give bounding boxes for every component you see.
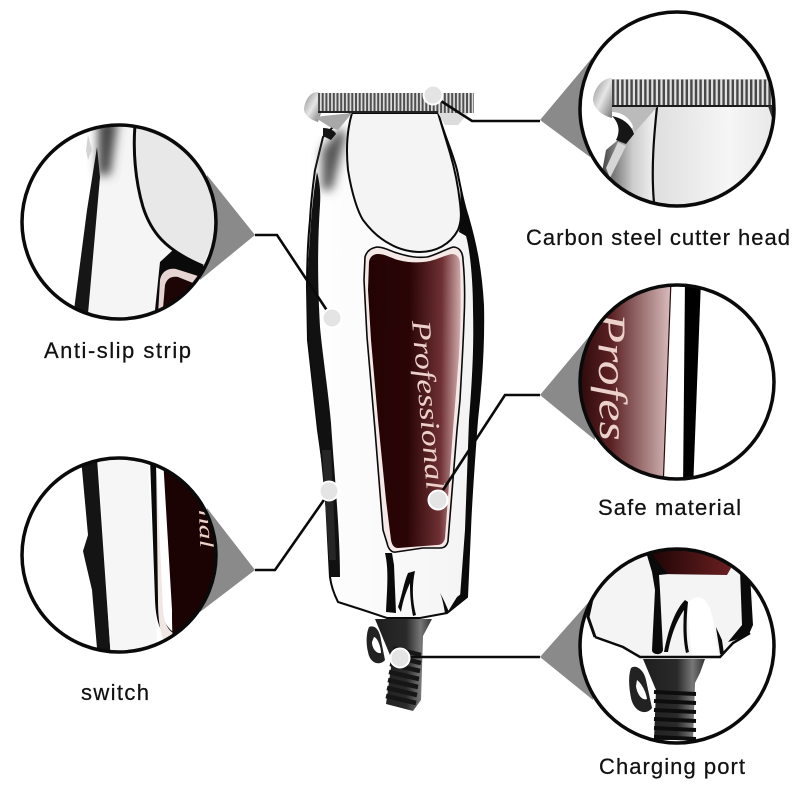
- leader line: [405, 656, 540, 658]
- magnified switch detail: [82, 460, 214, 650]
- marker dots: [320, 86, 448, 668]
- pointer wedge: [540, 333, 595, 440]
- leader line: cutter head: [441, 101, 540, 121]
- script logo: Professional: Professional: [406, 318, 451, 491]
- callout: switch: [22, 458, 326, 660]
- ribbed switch: [322, 450, 336, 560]
- metal body: [307, 112, 483, 618]
- shiny top plate: [347, 113, 461, 252]
- shoulder shading: [322, 128, 346, 190]
- label: carbon steel cutter head: Carbon steel cutter head: [526, 225, 790, 250]
- label: switch: switch: [81, 680, 149, 705]
- callout: charging port: [405, 540, 774, 743]
- left black grip strip: [307, 172, 340, 577]
- label: safe material: Safe material: [598, 495, 741, 520]
- callout: safe material: [443, 280, 774, 490]
- leader line: [443, 395, 540, 490]
- label: anti-slip strip: Anti-slip strip: [44, 338, 191, 363]
- cord and strain relief: [367, 619, 432, 711]
- leader line: [255, 497, 326, 570]
- blade head: [304, 92, 474, 140]
- lower base details: [385, 553, 467, 616]
- magnified cutter head: [582, 66, 772, 204]
- magnified strip detail: [74, 126, 214, 317]
- wine red panel: [364, 247, 465, 552]
- callout: anti-slip strip: [22, 120, 328, 330]
- pointer wedge: [540, 58, 592, 157]
- magnified panel detail: [582, 287, 701, 478]
- pointer wedge: [200, 175, 255, 280]
- magnified port detail: [582, 550, 753, 741]
- right black edge: [458, 168, 483, 597]
- pointer wedge: [540, 595, 595, 700]
- pointer wedge: [200, 508, 255, 612]
- callout: carbon steel cutter head: [540, 12, 780, 206]
- clipper illustration: [304, 92, 483, 711]
- magnified switch detail: nal: [194, 509, 217, 549]
- leader line: [255, 235, 328, 312]
- label: charging port: Charging port: [599, 754, 745, 779]
- magnified panel detail: Profes: [589, 311, 636, 441]
